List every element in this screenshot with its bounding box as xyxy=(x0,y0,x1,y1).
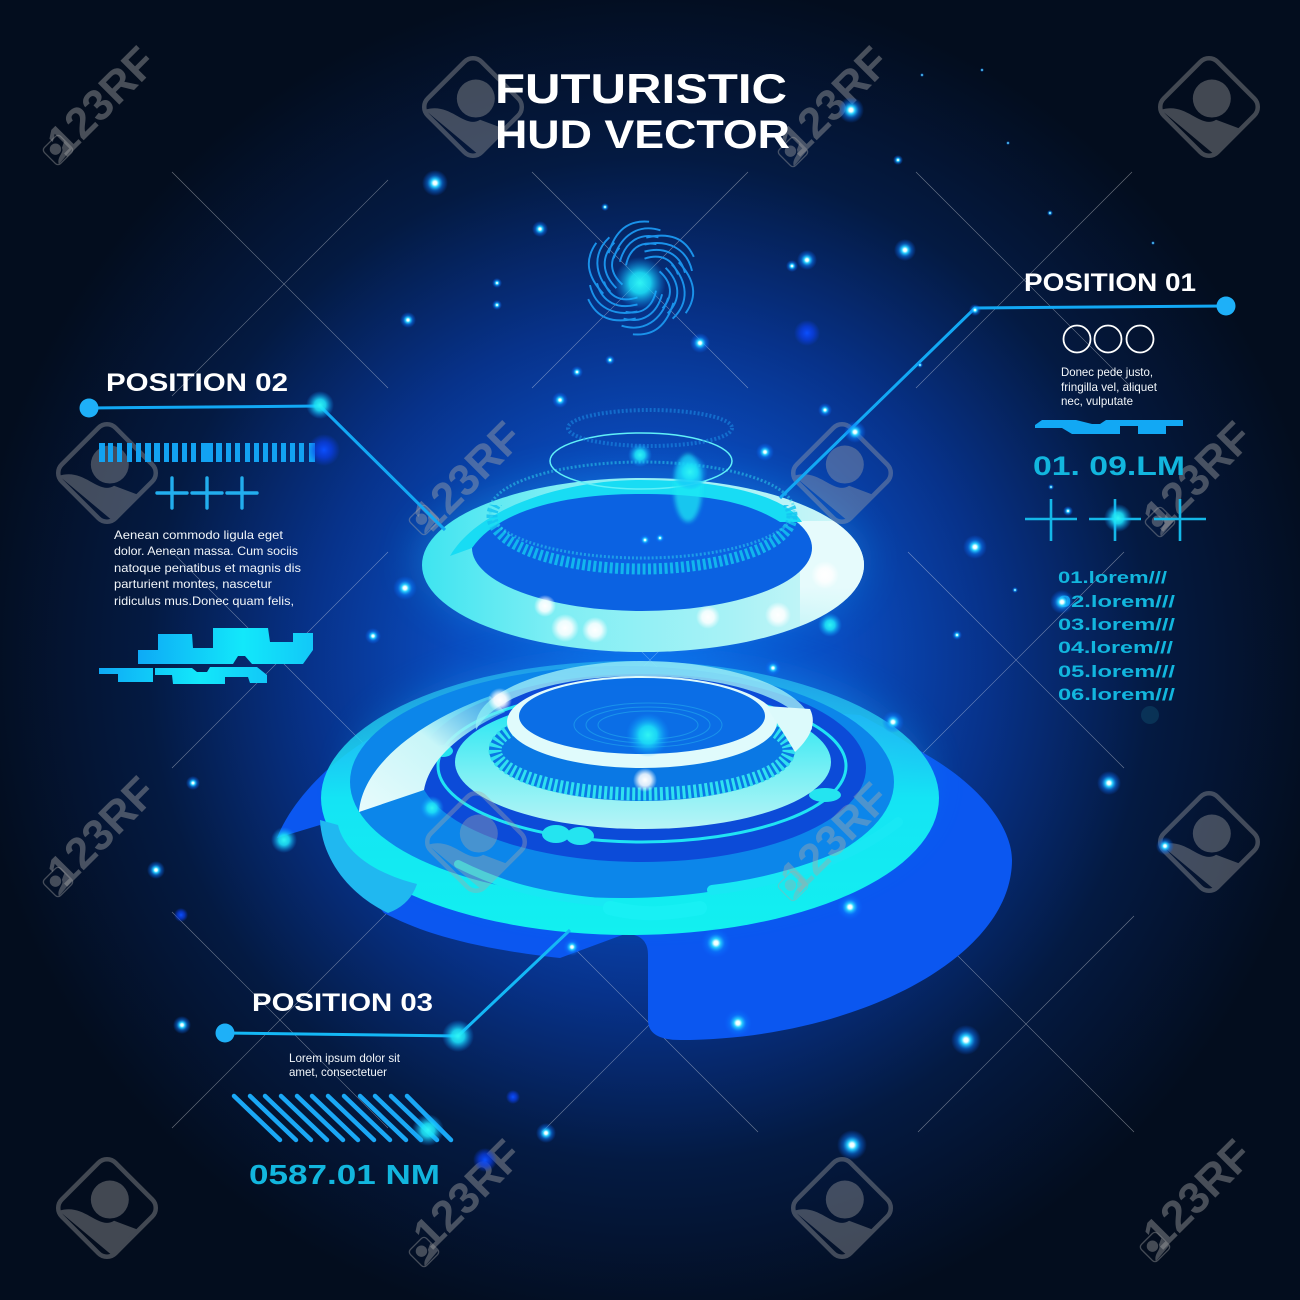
description: Aenean commodo ligula eget xyxy=(114,528,284,542)
upper dotted arc xyxy=(490,462,794,558)
panel: position 01 xyxy=(780,269,1236,704)
watermarks: 123RF xyxy=(1134,1131,1262,1259)
fingerprint swirl icon xyxy=(578,211,704,345)
description: parturient montes, nascetur xyxy=(114,577,272,591)
heading: POSITION 03 xyxy=(252,989,433,1017)
list: 05.lorem/// xyxy=(1058,662,1175,681)
tick ring xyxy=(488,725,796,801)
title: FUTURISTIC xyxy=(495,65,787,112)
list: 04.lorem/// xyxy=(1058,638,1173,657)
small top ellipse xyxy=(550,433,732,489)
hatch bars xyxy=(234,1096,451,1140)
upper ring xyxy=(422,478,864,652)
crosshairs xyxy=(1025,499,1206,541)
title: HUD VECTOR xyxy=(495,113,790,157)
description: Lorem ipsum dolor sit xyxy=(289,1051,401,1065)
faint fingerprint in hole xyxy=(574,703,722,747)
list xyxy=(1058,568,1175,704)
description: amet, consectetuer xyxy=(289,1065,387,1079)
faint top ring xyxy=(568,410,732,446)
upper cyan rim xyxy=(450,480,802,556)
upper tick ring xyxy=(486,505,798,574)
title xyxy=(495,65,790,157)
readout: 01. 09.LM xyxy=(1033,451,1185,481)
description: nec, vulputate xyxy=(1061,394,1133,408)
pale top ring xyxy=(476,661,812,730)
description xyxy=(1061,365,1158,408)
list: 03.lorem/// xyxy=(1058,615,1175,634)
three circles xyxy=(1064,326,1154,352)
glow behind lower platform xyxy=(360,660,920,900)
watermarks: 123RF xyxy=(404,1131,532,1259)
lower platform xyxy=(277,660,1012,1040)
blocky shape xyxy=(1035,420,1183,434)
dark blue inner band xyxy=(418,674,866,862)
white segment on upper ring xyxy=(800,521,864,626)
watermarks: 123RF xyxy=(771,38,899,166)
blocky shapes xyxy=(99,628,313,684)
lower hole xyxy=(519,678,765,754)
readout: 0587.01 NM xyxy=(249,1159,440,1190)
list: 02.lorem/// xyxy=(1058,592,1175,611)
thin crossing guide lines xyxy=(172,172,1134,1132)
watermarks: 123RF xyxy=(1134,413,1262,541)
outer cyan ring xyxy=(321,661,939,935)
description: Donec pede justo, xyxy=(1061,365,1153,379)
barcode xyxy=(99,443,315,462)
blue band inside cyan ring xyxy=(350,666,894,898)
upper ring hole xyxy=(472,485,812,611)
watermarks: 123RF xyxy=(771,774,899,902)
connector line xyxy=(216,930,570,1042)
vertical glow xyxy=(674,454,702,522)
lower blue disc xyxy=(277,690,1012,1040)
heading: POSITION 02 xyxy=(106,369,288,397)
panel: position 02 xyxy=(80,369,445,684)
cyan ring left tab xyxy=(320,820,417,913)
upper glow xyxy=(420,480,860,640)
connector line xyxy=(80,398,445,530)
white arc right xyxy=(766,706,813,752)
white ring xyxy=(455,695,831,829)
watermarks: 123RF xyxy=(38,768,166,896)
thin cyan ring with nodes xyxy=(433,690,846,845)
upper platform xyxy=(420,410,864,652)
description xyxy=(289,1051,401,1079)
description: natoque penatibus et magnis dis xyxy=(114,561,301,575)
glowing particles xyxy=(147,68,1174,1172)
watermarks: 123RF xyxy=(38,38,166,166)
description: dolor. Aenean massa. Cum sociis xyxy=(114,544,298,558)
heading: POSITION 01 xyxy=(1024,269,1196,297)
watermarks: 123RF xyxy=(404,413,532,541)
bottom cyan stripes xyxy=(458,822,898,913)
list: 01.lorem/// xyxy=(1058,568,1167,587)
panel: position 03 xyxy=(216,930,570,1190)
description: fringilla vel, aliquet xyxy=(1061,380,1158,394)
connector line xyxy=(780,296,1236,498)
description: ridiculus mus.Donec quam felis, xyxy=(114,594,294,608)
white arc left xyxy=(359,696,505,812)
white inner band xyxy=(507,676,777,768)
list: 06.lorem/// xyxy=(1058,685,1175,704)
plus signs xyxy=(157,478,257,508)
description xyxy=(114,528,301,608)
